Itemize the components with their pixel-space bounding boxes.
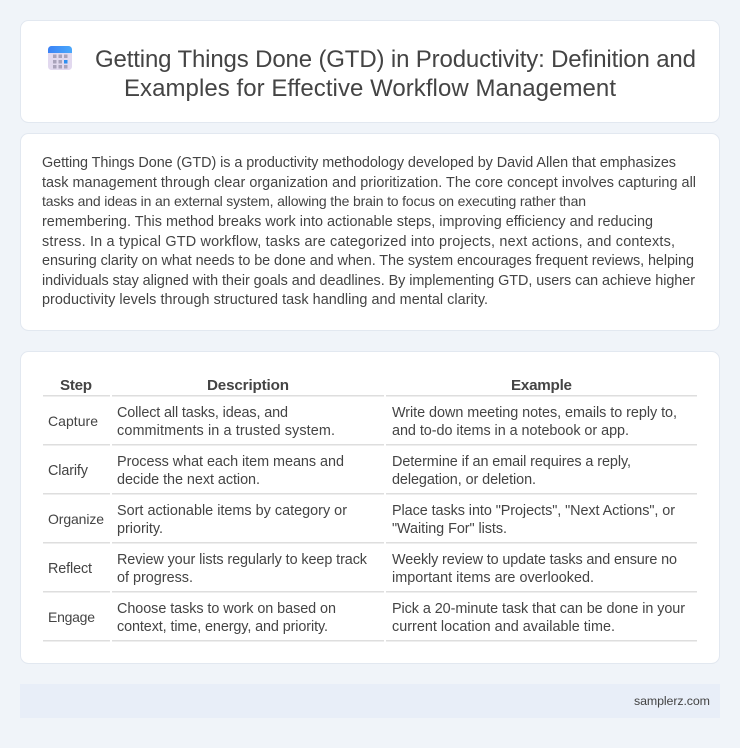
row: Reflect: of progress. — [117, 570, 193, 586]
row: Capture: Collect all tasks, ideas, and — [117, 405, 288, 421]
row: Engage: current location and available time. — [392, 619, 615, 635]
text block: GTD definition: productivity levels through structured task handling and mental clarity. — [42, 292, 488, 308]
text block: GTD definition: stress. In a typical GTD workflow, tasks are categorized into projects, next actions, and contexts, — [42, 234, 675, 250]
table header: Example — [511, 377, 572, 394]
title: Examples for Effective Workflow Management — [124, 75, 616, 102]
title — [95, 46, 696, 102]
row: Reflect: important items are overlooked. — [392, 570, 594, 586]
footer bar: samplerz.com — [634, 694, 710, 708]
row: Reflect: Weekly review to update tasks and ensure no — [392, 552, 677, 568]
row: Reflect: Reflect — [48, 561, 92, 577]
text block: GTD definition: Getting Things Done (GTD) is a productivity methodology developed by David Allen that emphasizes — [42, 155, 676, 171]
footer bar — [20, 684, 720, 718]
row: Clarify: delegation, or deletion. — [392, 472, 536, 488]
table header: Description — [207, 377, 289, 394]
row: Capture: and to-do items in a notebook or app. — [392, 423, 629, 439]
row: Clarify: Determine if an email requires a reply, — [392, 454, 631, 470]
table header: Step — [60, 377, 92, 394]
row: Clarify: Clarify — [48, 463, 89, 479]
row: Organize: "Waiting For" lists. — [392, 521, 507, 537]
icon: calendar — [48, 46, 72, 70]
row: Reflect — [43, 552, 697, 592]
row: Engage: Pick a 20-minute task that can be done in your — [392, 601, 685, 617]
text block: GTD definition: individuals stay aligned with their goals and deadlines. By implementing GTD, users can achieve higher — [42, 273, 695, 289]
row: Organize — [43, 503, 697, 544]
text block: GTD definition: tasks and ideas in an external system, allowing the brain to focus on executing rather than — [42, 193, 586, 209]
row: Organize: Sort actionable items by category or — [117, 503, 347, 519]
row: Capture: Capture — [48, 413, 98, 429]
row: Engage: context, time, energy, and priority. — [117, 619, 328, 635]
panel: introduction — [20, 134, 720, 330]
text block: GTD definition: ensuring clarity on what needs to be done and when. The system encourages frequent reviews, helping — [42, 253, 694, 269]
row: Engage: Engage — [48, 609, 95, 625]
row: Clarify — [43, 454, 697, 494]
row: Organize: Place tasks into "Projects", "Next Actions", or — [392, 503, 675, 519]
row: Capture: commitments in a trusted system. — [117, 423, 335, 439]
row: Organize: priority. — [117, 521, 163, 537]
row: Capture — [43, 405, 697, 446]
row: Reflect: Review your lists regularly to keep track — [117, 552, 368, 568]
panel: steps table — [20, 352, 720, 664]
row: Capture: Write down meeting notes, emails to reply to, — [392, 405, 677, 421]
row: Organize: Organize — [48, 511, 104, 527]
row: Engage: Choose tasks to work on based on — [117, 601, 336, 617]
title: Getting Things Done (GTD) in Productivity: Definition and — [95, 46, 696, 73]
row: Clarify: Process what each item means and — [117, 454, 344, 470]
panel: title header — [20, 20, 720, 122]
text block: GTD definition — [42, 155, 696, 308]
table header — [43, 377, 697, 396]
text block: GTD definition: remembering. This method breaks work into actionable steps, improving efficiency and reducing — [42, 214, 653, 230]
row: Clarify: decide the next action. — [117, 472, 260, 488]
text block: GTD definition: task management through clear organization and prioritization. The core concept involves capturing all — [42, 175, 696, 191]
row: Engage — [43, 601, 697, 642]
